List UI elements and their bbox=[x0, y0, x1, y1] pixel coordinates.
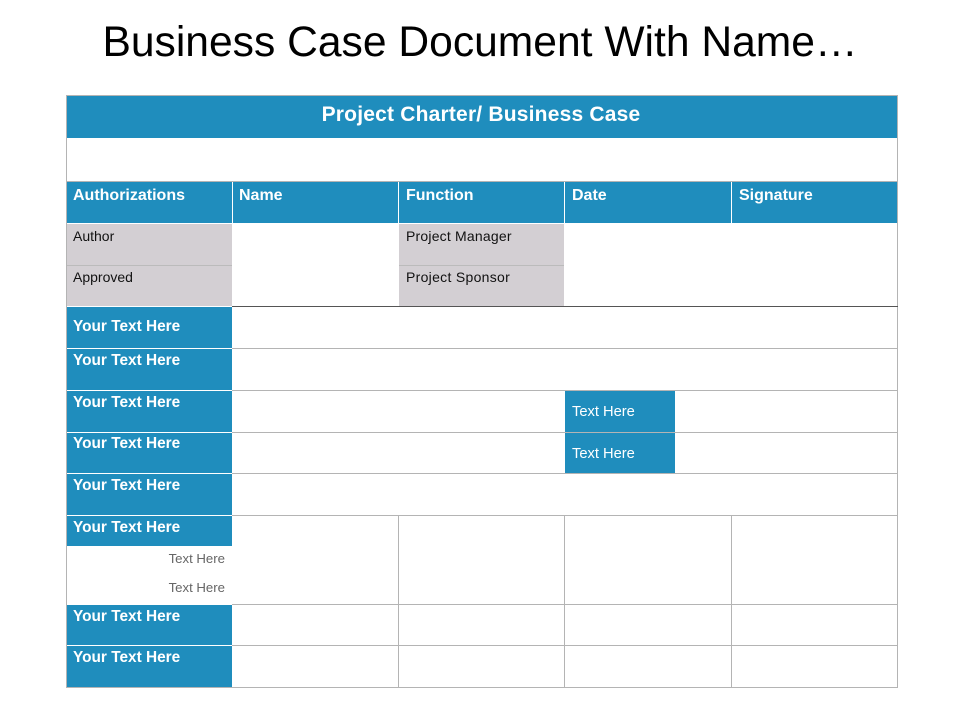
row label 3: Your Text Here bbox=[73, 394, 180, 411]
row label: Author: Author bbox=[73, 228, 114, 244]
sub-label 2: Text Here bbox=[169, 580, 225, 595]
column header: Date: Date bbox=[572, 187, 607, 204]
row label 4: Your Text Here bbox=[73, 435, 180, 452]
row label 6: Your Text Here bbox=[73, 519, 180, 536]
row label 5: Your Text Here bbox=[73, 477, 180, 494]
row label 2: Your Text Here bbox=[73, 352, 180, 369]
sub-label 1: Text Here bbox=[169, 551, 225, 566]
row label 7: Your Text Here bbox=[73, 608, 180, 625]
column header: Name: Name bbox=[239, 187, 283, 204]
table heading: Project Charter/ Business Case bbox=[322, 103, 640, 126]
role: Project Manager: Project Manager bbox=[406, 228, 512, 244]
grid lines and cell fills are positioned relative to this table bbox=[66, 95, 898, 688]
title: Business Case Document With Name… bbox=[102, 18, 858, 66]
row label 1: Your Text Here bbox=[73, 318, 180, 335]
column header: Function: Function bbox=[406, 187, 474, 204]
inline cell label 2: Text Here bbox=[572, 446, 635, 462]
column header: Signature: Signature bbox=[739, 187, 813, 204]
role: Project Sponsor: Project Sponsor bbox=[406, 269, 510, 285]
row label: Approved: Approved bbox=[73, 269, 133, 285]
panel: project charter table bbox=[66, 95, 898, 688]
inline cell label 1: Text Here bbox=[572, 404, 635, 420]
row label 8: Your Text Here bbox=[73, 649, 180, 666]
column header: Authorizations: Authorizations bbox=[73, 187, 185, 204]
